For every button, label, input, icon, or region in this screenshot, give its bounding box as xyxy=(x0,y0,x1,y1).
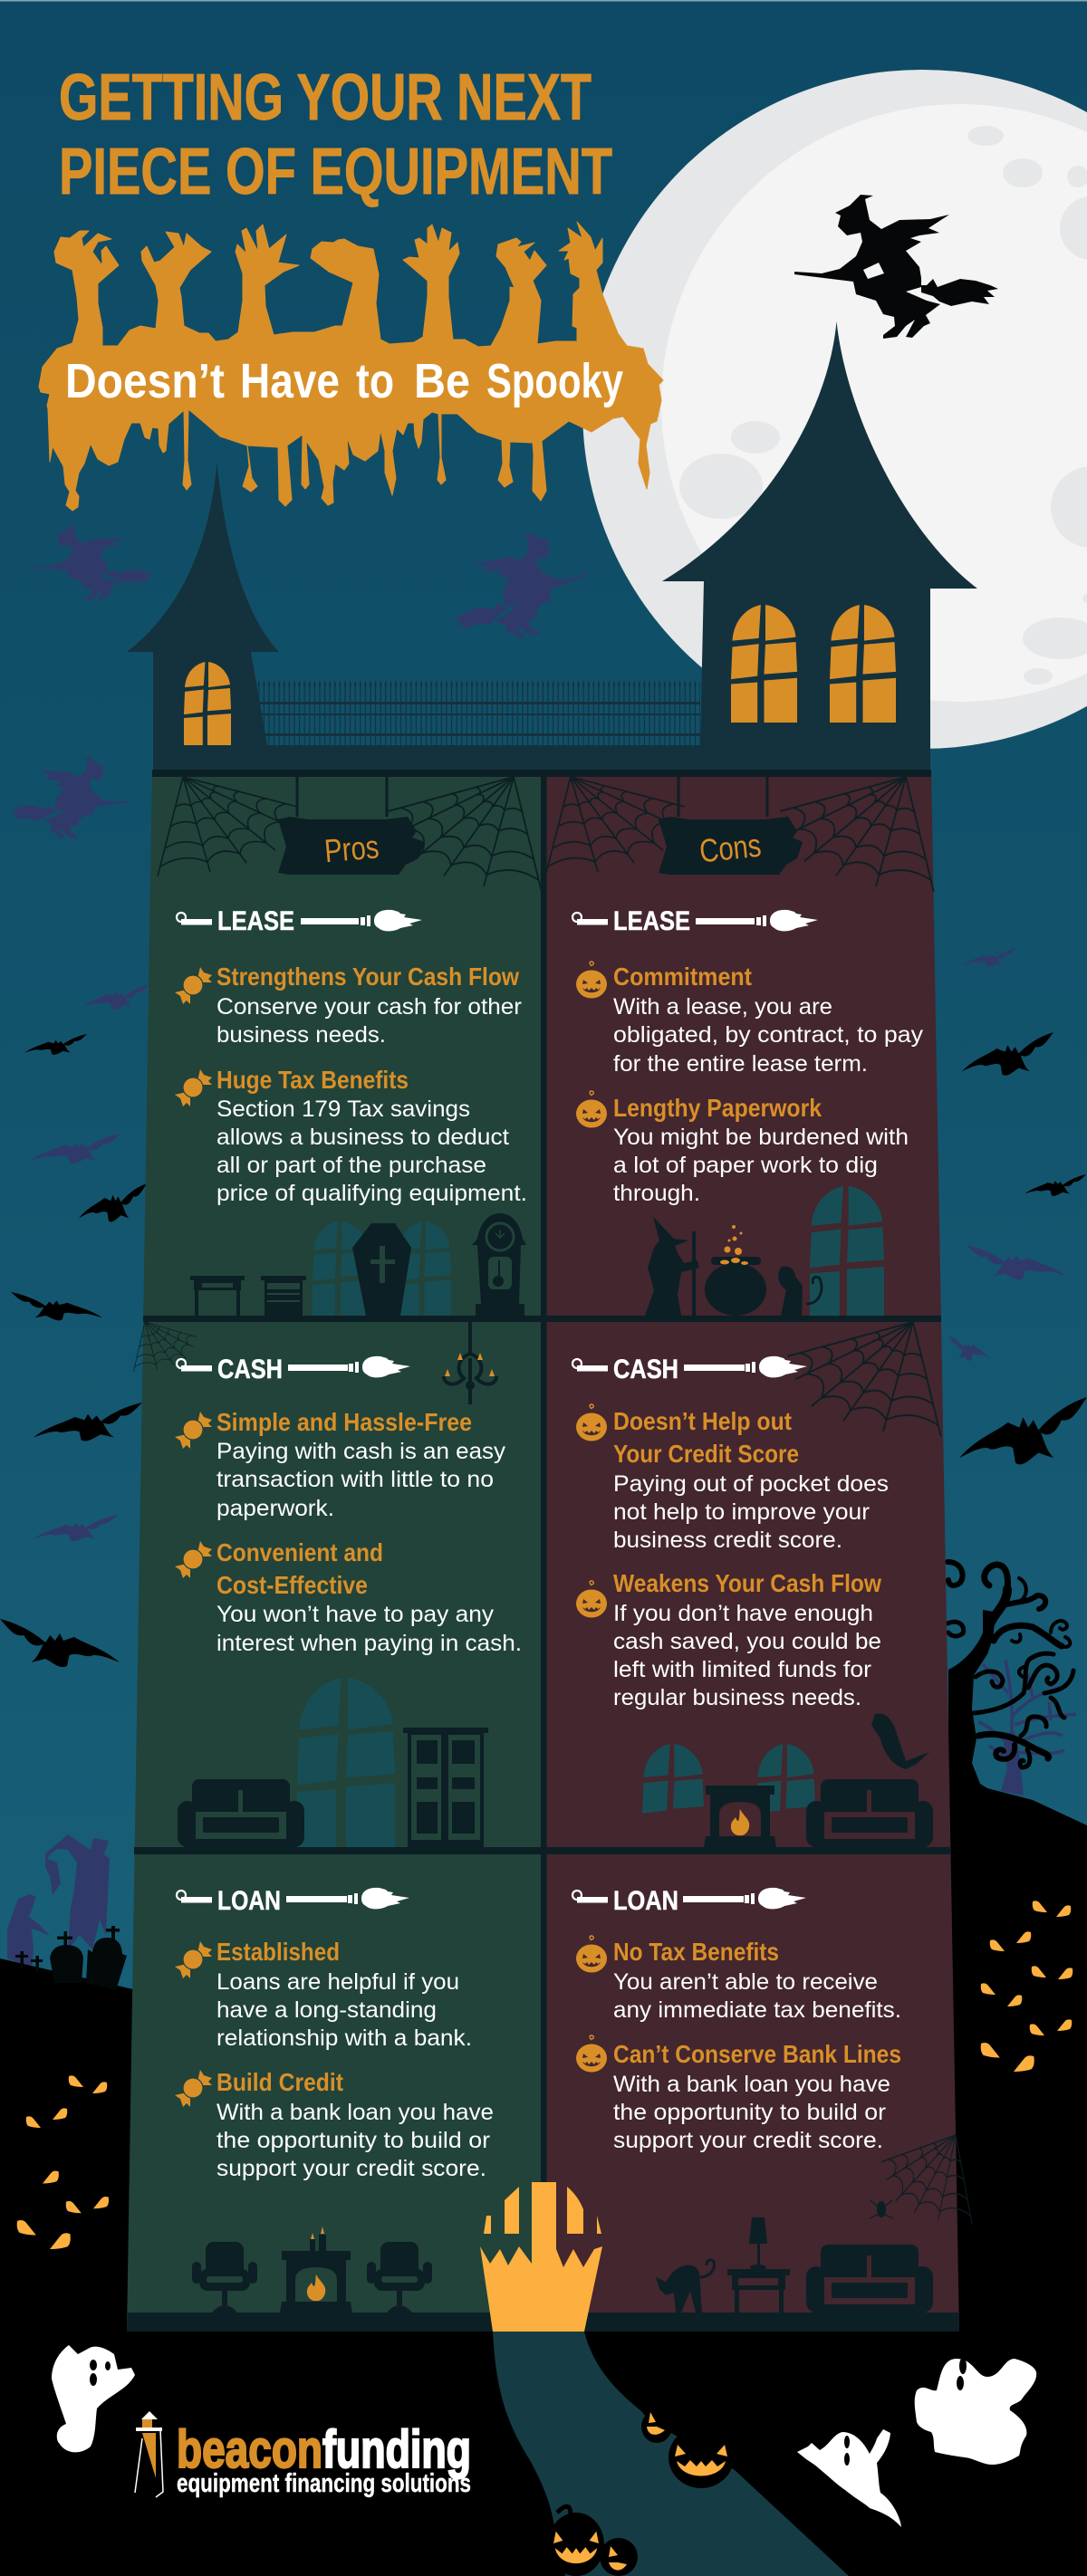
house beams and floors xyxy=(127,770,959,2332)
item: established: Loans are helpful if you xyxy=(216,1969,459,1995)
cobwebs xyxy=(133,777,972,2225)
panel: cons xyxy=(546,770,959,2332)
label: lease with broom: LEASE xyxy=(217,906,294,936)
item: can't conserve bank lines xyxy=(576,2035,901,2153)
item: convenient and cost-effective: You won’t have to pay any xyxy=(216,1602,495,1627)
house exterior: towers, roofs and fence xyxy=(127,321,977,770)
item: lengthy paperwork: through. xyxy=(613,1181,700,1206)
item: weakens your cash flow: Weakens Your Cash Flow xyxy=(613,1569,882,1597)
subtitle: Spooky xyxy=(486,354,623,408)
label: loan with broom xyxy=(177,1886,409,1916)
title: PIECE OF EQUIPMENT xyxy=(59,136,612,208)
room: window, sofa and wardrobe xyxy=(178,1678,488,1847)
item: huge tax benefits: Section 179 Tax savings xyxy=(216,1096,470,1122)
item: weakens your cash flow: cash saved, you could be xyxy=(613,1629,881,1654)
item: simple and hassle-free: transaction with little to no xyxy=(216,1467,494,1492)
icon: big ghost right xyxy=(915,2358,1036,2465)
item: simple and hassle-free: Simple and Hassle-Free xyxy=(216,1408,472,1436)
label: lease with broom xyxy=(572,906,818,936)
item: doesn't help out your credit score: Paying out of pocket does xyxy=(613,1471,889,1497)
section: pros cash xyxy=(175,1322,522,1847)
icon: purple background tree xyxy=(978,1660,1076,1796)
item: huge tax benefits: Huge Tax Benefits xyxy=(216,1066,409,1094)
hillside ground xyxy=(0,1610,1087,2576)
logo: beacon funding xyxy=(135,2411,471,2498)
section: cons cash xyxy=(572,1355,933,1847)
item: doesn't help out your credit score: Doesn’t Help out xyxy=(613,1407,792,1435)
item: established: Established xyxy=(216,1938,340,1966)
item: doesn't help out your credit score: not help to improve your xyxy=(613,1499,870,1525)
label: lease with broom xyxy=(177,906,422,936)
item: huge tax benefits: all or part of the purchase xyxy=(216,1153,486,1178)
title: GETTING YOUR NEXT xyxy=(59,62,592,134)
subtitle: Doesn’t xyxy=(65,354,225,408)
house windows glowing xyxy=(184,605,896,745)
item: can't conserve bank lines: support your credit score. xyxy=(613,2128,883,2153)
item: build credit xyxy=(175,2068,494,2181)
room: chairs, fireplace and candles xyxy=(192,2226,432,2313)
item: can't conserve bank lines: Can’t Conserve Bank Lines xyxy=(613,2040,901,2068)
subtitle: Have xyxy=(240,354,340,408)
item: lengthy paperwork: You might be burdened with xyxy=(613,1125,909,1150)
item: build credit: support your credit score. xyxy=(216,2156,486,2181)
label: cash with broom: CASH xyxy=(217,1355,283,1384)
doorway light xyxy=(480,2182,602,2332)
panel: pros xyxy=(127,770,541,2332)
item: no tax benefits: No Tax Benefits xyxy=(613,1938,779,1966)
item: strengthens your cash flow: Conserve your cash for other xyxy=(216,994,522,1020)
item: weakens your cash flow: left with limited funds for xyxy=(613,1657,871,1682)
label: cash with broom xyxy=(572,1355,807,1384)
room: cat, lamp table, sofa and spider xyxy=(656,2200,933,2313)
item: commitment: With a lease, you are xyxy=(613,994,832,1020)
title xyxy=(59,62,612,208)
item: can't conserve bank lines: With a bank loan you have xyxy=(613,2072,890,2097)
item: convenient and cost-effective: interest when paying in cash. xyxy=(216,1631,522,1656)
room: coffin, windows, clock and tables xyxy=(190,1213,526,1316)
icon: flying witch on the moon xyxy=(794,195,998,339)
icons: purple bats xyxy=(30,948,1067,1541)
item: commitment: Commitment xyxy=(613,962,752,991)
item: doesn't help out your credit score: Your Credit Score xyxy=(613,1440,799,1468)
item: commitment xyxy=(576,962,924,1077)
label: loan with broom xyxy=(572,1886,806,1916)
label: lease with broom: LEASE xyxy=(613,906,690,936)
item: build credit: the opportunity to build or xyxy=(216,2128,490,2153)
item: strengthens your cash flow: Strengthens Your Cash Flow xyxy=(216,962,520,991)
room: windows, fireplace, sofa and ghost xyxy=(642,1713,933,1847)
icons: glowing eyes right xyxy=(981,1901,1073,2072)
icons: jack-o-lanterns xyxy=(548,2410,734,2576)
icons: purple background witches xyxy=(10,521,601,838)
top edge line xyxy=(0,0,1087,2)
icon: lighthouse xyxy=(135,2411,163,2497)
section: cons loan xyxy=(572,1886,933,2313)
icons: bats xyxy=(0,1032,1087,1667)
item: convenient and cost-effective xyxy=(175,1538,522,1656)
icon: purple zombies xyxy=(7,1834,110,1968)
item: weakens your cash flow xyxy=(576,1569,882,1710)
icon: small ghost right xyxy=(797,2429,901,2527)
moon xyxy=(582,70,1087,749)
icon: ghost left xyxy=(52,2345,135,2452)
icon: black twisted tree xyxy=(948,1562,1073,1767)
sign: cons xyxy=(659,777,803,875)
subtitle: Be xyxy=(414,354,470,408)
item: lengthy paperwork: Lengthy Paperwork xyxy=(613,1094,822,1122)
item: lengthy paperwork: a lot of paper work to dig xyxy=(613,1153,878,1178)
logo: beacon funding: beacon xyxy=(177,2420,322,2479)
logo: beacon funding: equipment financing solutions xyxy=(177,2469,471,2498)
item: build credit: Build Credit xyxy=(216,2068,343,2096)
item: simple and hassle-free xyxy=(175,1408,506,1521)
label: loan with broom: LOAN xyxy=(613,1886,678,1916)
item: lengthy paperwork xyxy=(576,1091,909,1206)
item: strengthens your cash flow xyxy=(175,962,522,1048)
item: doesn't help out your credit score xyxy=(576,1404,889,1553)
label: cash with broom xyxy=(177,1355,410,1384)
icon: chandelier xyxy=(444,1322,496,1404)
item: no tax benefits xyxy=(576,1936,901,2023)
icons: glowing eyes left xyxy=(17,2075,109,2249)
room: witch, cauldron, cat and window xyxy=(645,1186,884,1316)
item: convenient and cost-effective: Cost-Effective xyxy=(216,1571,368,1599)
subtitle xyxy=(65,354,623,408)
illustration: zombie hands rising from slime xyxy=(39,222,663,511)
sign: pros: Pros xyxy=(323,828,380,869)
label: loan with broom: LOAN xyxy=(217,1886,281,1916)
item: commitment: obligated, by contract, to pay xyxy=(613,1022,924,1048)
section: cons lease xyxy=(572,906,924,1316)
item: build credit: With a bank loan you have xyxy=(216,2100,494,2125)
sign: cons: Cons xyxy=(697,827,763,869)
item: established xyxy=(175,1938,472,2051)
item: established: have a long-standing xyxy=(216,1997,437,2023)
item: established: relationship with a bank. xyxy=(216,2025,472,2051)
item: no tax benefits: You aren’t able to receive xyxy=(613,1969,878,1995)
label: cash with broom: CASH xyxy=(613,1355,678,1384)
section: pros loan xyxy=(175,1886,494,2313)
item: weakens your cash flow: If you don’t have enough xyxy=(613,1601,873,1626)
section: pros lease xyxy=(175,906,527,1316)
sign: pros xyxy=(278,777,425,875)
item: huge tax benefits: price of qualifying equipment. xyxy=(216,1181,527,1206)
walking path xyxy=(493,2332,849,2576)
item: strengthens your cash flow: business needs. xyxy=(216,1022,386,1048)
icons: graveyard tombstones xyxy=(15,1926,127,1990)
item: convenient and cost-effective: Convenient and xyxy=(216,1538,383,1566)
item: huge tax benefits xyxy=(175,1066,527,1206)
item: weakens your cash flow: regular business needs. xyxy=(613,1685,861,1710)
item: huge tax benefits: allows a business to deduct xyxy=(216,1125,509,1150)
item: no tax benefits: any immediate tax benefits. xyxy=(613,1997,901,2023)
item: simple and hassle-free: paperwork. xyxy=(216,1496,334,1521)
item: can't conserve bank lines: the opportunity to build or xyxy=(613,2100,886,2125)
logo: beacon funding: funding xyxy=(322,2420,471,2479)
item: simple and hassle-free: Paying with cash is an easy xyxy=(216,1439,506,1464)
subtitle: to xyxy=(356,354,394,408)
item: commitment: for the entire lease term. xyxy=(613,1051,868,1077)
item: doesn't help out your credit score: business credit score. xyxy=(613,1527,842,1553)
